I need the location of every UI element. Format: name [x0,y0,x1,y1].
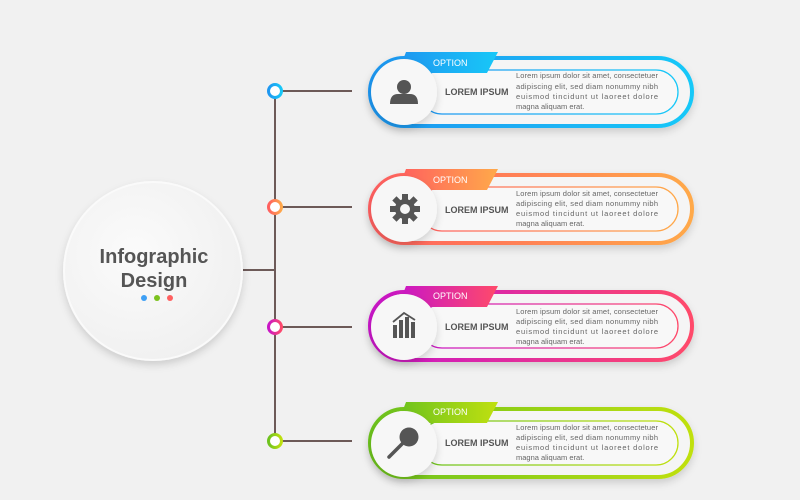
card 2 [370,169,692,243]
card 1: adipiscing elit, sed diam nonummy nibh [516,82,658,91]
card 4: magna aliquam erat. [516,453,584,462]
card 1: LOREM IPSUM [445,87,509,97]
connector lines [243,91,352,441]
card 1: euismod tincidunt ut laoreet dolore [516,92,658,101]
card 3: OPTION [433,291,468,301]
card 2: OPTION [433,175,468,185]
card 4: adipiscing elit, sed diam nonummy nibh [516,433,658,442]
card 3 [370,286,692,360]
card 4: OPTION [433,407,468,417]
card 4 [370,402,692,477]
card 3: adipiscing elit, sed diam nonummy nibh [516,317,658,326]
card 3: euismod tincidunt ut laoreet dolore [516,327,658,336]
card 2: adipiscing elit, sed diam nonummy nibh [516,199,658,208]
card 3: magna aliquam erat. [516,337,584,346]
card 3: LOREM IPSUM [445,322,509,332]
central circle: Infographic Design [64,182,242,360]
card 1 [370,52,692,126]
card 2: magna aliquam erat. [516,219,584,228]
card 2: Lorem ipsum dolor sit amet, consectetuer [516,189,658,198]
card 1: magna aliquam erat. [516,102,584,111]
card 3: Lorem ipsum dolor sit amet, consectetuer [516,307,658,316]
central circle: Infographic Design: Design [121,270,187,292]
card 1: Lorem ipsum dolor sit amet, consectetuer [516,71,658,80]
card 1: OPTION [433,58,468,68]
card 4: euismod tincidunt ut laoreet dolore [516,443,658,452]
card 2: euismod tincidunt ut laoreet dolore [516,209,658,218]
node markers [268,84,282,448]
card 4: Lorem ipsum dolor sit amet, consectetuer [516,423,658,432]
card 2: LOREM IPSUM [445,205,509,215]
card 4: LOREM IPSUM [445,438,509,448]
central circle: Infographic Design: Infographic [100,246,208,268]
